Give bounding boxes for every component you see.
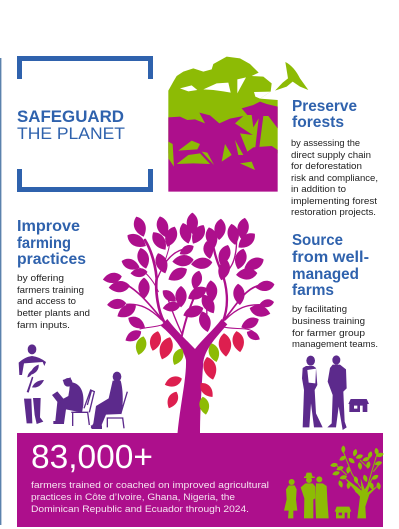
body: risk and compliance, [291, 173, 378, 183]
body: implementing forest [291, 196, 377, 206]
body: better plants and [17, 308, 90, 318]
illustration: central tree [102, 213, 275, 435]
green gaps in jungle [168, 140, 255, 170]
figure: woman [284, 479, 297, 518]
green canopy and background [168, 57, 278, 153]
body: farmers training [17, 285, 84, 295]
body: direct supply chain [291, 150, 371, 160]
statistic: 83,000+ [31, 438, 153, 475]
body: restoration projects. [291, 207, 376, 217]
description [31, 480, 269, 515]
clipboard [307, 369, 316, 383]
body: business training [292, 316, 365, 326]
body [291, 138, 378, 217]
palm tree [242, 102, 278, 147]
heading: practices [17, 251, 86, 268]
title: SAFEGUARD [17, 107, 124, 126]
body: management teams. [292, 339, 378, 349]
frame brackets [20, 58, 150, 190]
body: by offering [17, 273, 64, 283]
text block: preserve forests [291, 98, 378, 217]
heading [17, 218, 86, 268]
figure: man [327, 355, 347, 430]
heading: Source [292, 232, 343, 249]
heading: forests [292, 114, 344, 131]
banner background [17, 433, 383, 527]
body: and access to [17, 296, 76, 306]
icon: bird [275, 62, 308, 91]
heading: Improve [17, 218, 80, 235]
body: for deforestation [291, 161, 362, 171]
icon: house [348, 399, 369, 412]
red leaves [148, 330, 246, 410]
body: for farmer group [292, 328, 365, 338]
text block: improve farming practices [17, 218, 90, 330]
heading [292, 232, 369, 299]
figure: man [315, 476, 329, 518]
icon: house [335, 507, 351, 518]
body [292, 304, 378, 349]
heading: managed [292, 266, 359, 283]
heading: Preserve [292, 98, 357, 115]
body [17, 273, 90, 330]
figure: seated reader [52, 377, 94, 426]
description: Dominican Republic and Ecuador through 2024. [31, 504, 249, 515]
illustration: two farm managers and house [302, 355, 369, 430]
panel: statistic banner [17, 433, 384, 527]
illustration: farmers in training [19, 344, 127, 429]
body: farm inputs. [17, 320, 70, 330]
figure: seated listener [91, 372, 127, 429]
illustration: rainforest and bird [168, 57, 308, 192]
tree [330, 445, 384, 518]
illustration: farmers, house and tree [284, 445, 384, 518]
title: THE PLANET [17, 124, 125, 143]
heading: farming [17, 235, 71, 252]
description: farmers trained or coached on improved agricultural [31, 480, 269, 491]
trunk and branches [123, 238, 265, 435]
figure: standing trainer with plant [19, 344, 46, 424]
heading: from well- [292, 249, 369, 266]
text block: source from well-managed farms [292, 232, 378, 349]
panel: safeguard title frame [17, 58, 150, 190]
purple leaves [102, 213, 275, 345]
heading: farms [292, 282, 334, 299]
magenta jungle silhouette [168, 113, 278, 192]
body: by assessing the [291, 138, 360, 148]
green leaves [134, 335, 221, 415]
heading [292, 98, 357, 131]
body: by facilitating [292, 304, 347, 314]
title [17, 107, 125, 143]
description: practices in Côte d’Ivoire, Ghana, Nigeria, the [31, 492, 235, 503]
body: in addition to [291, 184, 346, 194]
figure: man with hat [301, 473, 315, 518]
white gaps in canopy [180, 77, 271, 99]
figure: woman with clipboard [302, 356, 323, 427]
